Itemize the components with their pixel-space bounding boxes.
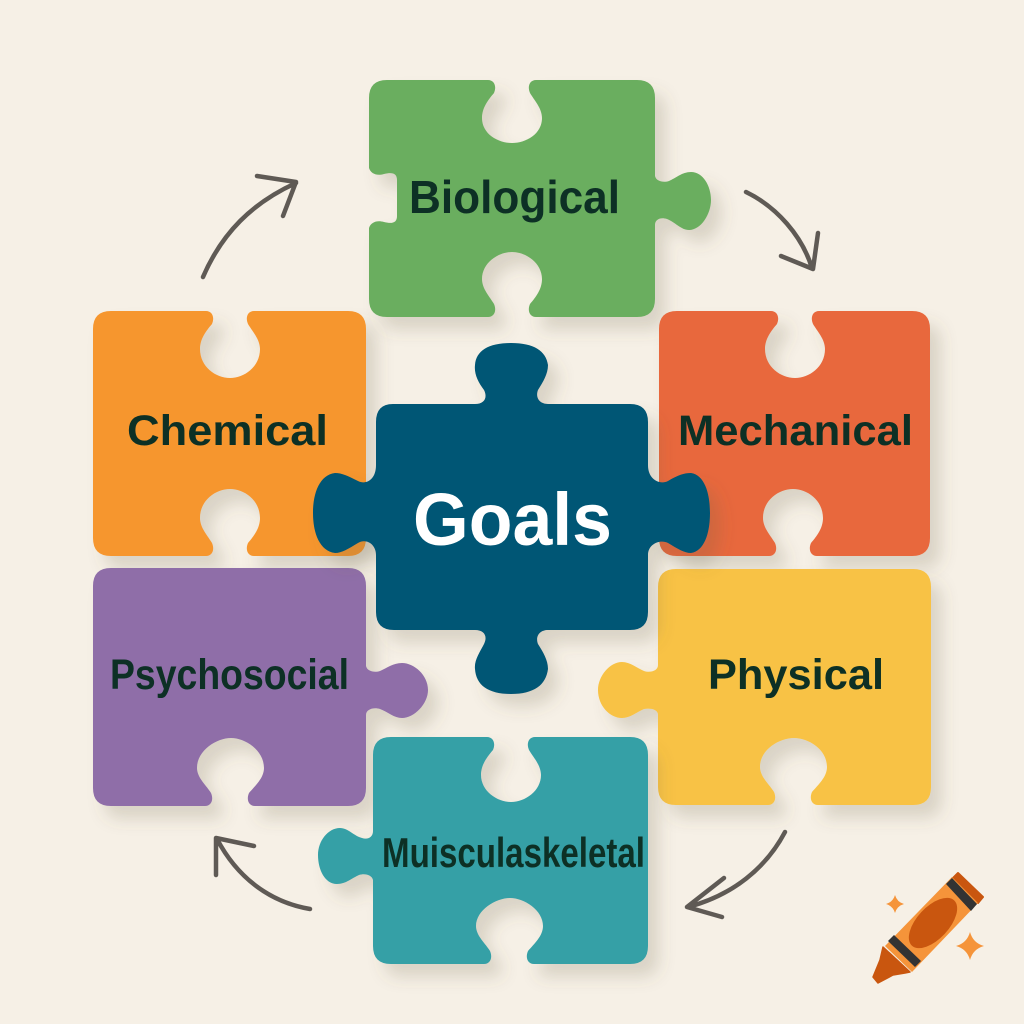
arrow: physical to musculoskeletal bbox=[687, 832, 785, 917]
label: Biological: Biological bbox=[409, 171, 620, 223]
puzzle piece: chemical bbox=[93, 311, 366, 556]
label: Muisculaskeletal: Muisculaskeletal bbox=[382, 829, 645, 876]
puzzle piece: mechanical bbox=[659, 311, 930, 556]
label: Mechanical: Mechanical bbox=[678, 407, 913, 455]
label: Physical: Physical bbox=[708, 651, 884, 699]
arrow: chemical to biological bbox=[203, 176, 296, 277]
label: Psychosocial: Psychosocial bbox=[110, 651, 349, 699]
arrow: musculoskeletal to psychosocial bbox=[216, 838, 310, 909]
puzzle piece: goals (centre) bbox=[313, 343, 710, 694]
puzzle piece: physical bbox=[598, 569, 931, 805]
puzzle piece: psychosocial bbox=[93, 568, 428, 806]
label: Chemical: Chemical bbox=[127, 407, 328, 455]
puzzle piece: biological bbox=[369, 80, 711, 317]
arrow: biological to mechanical bbox=[746, 192, 818, 269]
puzzle piece: musculoskeletal bbox=[318, 737, 648, 964]
icon: crayon with sparkles bbox=[873, 873, 984, 983]
label: Goals: Goals bbox=[413, 478, 612, 561]
